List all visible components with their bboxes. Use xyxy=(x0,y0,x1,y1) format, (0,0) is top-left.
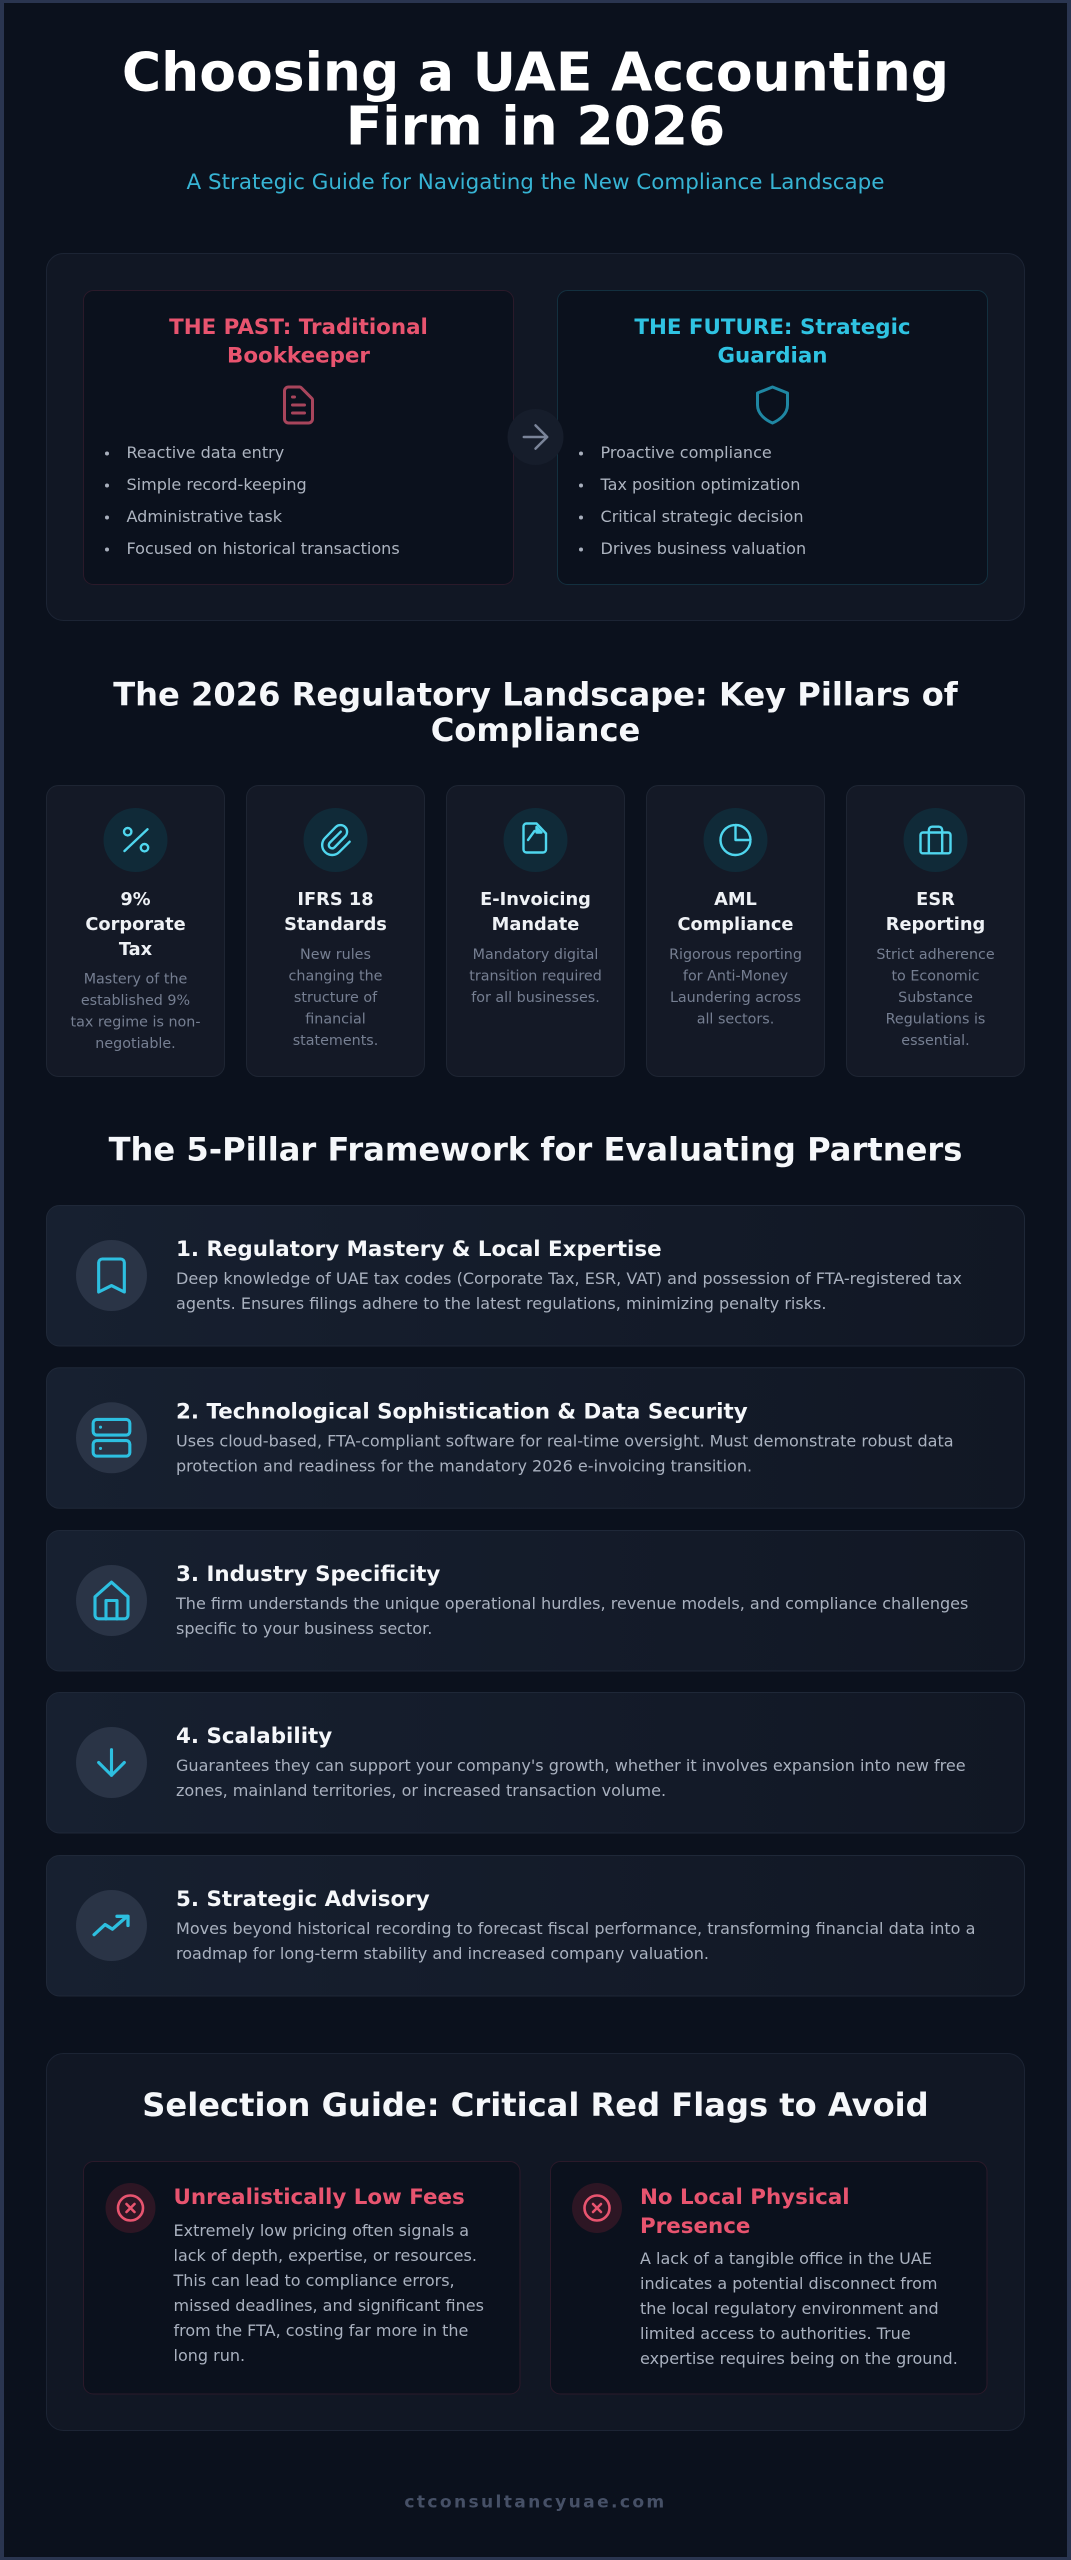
panel: red flags xyxy=(46,2054,1024,2430)
text: corporate tax: negotiable. xyxy=(95,1036,176,1052)
text: IFRS 18: changing the xyxy=(289,968,383,984)
text: no local presence: No Local Physical xyxy=(640,2185,850,2210)
text: e-invoicing: Mandate xyxy=(492,914,579,935)
heading: regulatory landscape: Compliance xyxy=(431,711,640,749)
icon: bookmark xyxy=(76,1240,147,1311)
pillar 4 xyxy=(46,1692,1024,1833)
icon: briefcase xyxy=(904,808,968,872)
text: pillar 2 xyxy=(176,1399,954,1475)
heading: 5-pillar framework: The 5-Pillar Framework for Evaluating Partners xyxy=(109,1130,962,1168)
text: pillar 3: 3. Industry Specificity xyxy=(176,1562,440,1587)
panel: the future xyxy=(558,290,988,584)
text: corporate tax: Mastery of the xyxy=(84,972,188,988)
text: AML: Laundering across xyxy=(670,990,801,1006)
text: pillar 2: protection and readiness for the mandatory 2026 e-invoicing transition. xyxy=(176,1456,752,1475)
text: no local presence: the local regulatory environment and xyxy=(640,2299,939,2318)
text: no local presence: expertise requires being on the ground. xyxy=(640,2349,958,2368)
heading: regulatory landscape xyxy=(113,676,959,749)
text: AML: Compliance xyxy=(678,914,793,935)
icon: trending up xyxy=(76,1890,147,1961)
text: no local presence: A lack of a tangible office in the UAE xyxy=(640,2249,932,2268)
text: pillar 2: Uses cloud-based, FTA-compliant software for real-time oversight. Must demonstrate robust data xyxy=(176,1431,954,1450)
icon: pie chart xyxy=(704,808,768,872)
text: AML xyxy=(669,889,802,1028)
title: Firm in 2026 xyxy=(346,94,725,158)
list: past traits xyxy=(105,443,400,558)
icon: x circle xyxy=(572,2183,622,2233)
pillar 1 xyxy=(46,1206,1024,1346)
text: pillar 3: The firm understands the unique operational hurdles, revenue models, and compliance challenges xyxy=(175,1594,968,1613)
text: low fees: missed deadlines, and significant fines xyxy=(174,2296,484,2315)
text: e-invoicing xyxy=(469,889,602,1006)
heading: the past: THE PAST: Traditional xyxy=(169,315,428,340)
icon: percent xyxy=(104,808,168,872)
title xyxy=(122,40,949,158)
text: e-invoicing: E-Invoicing xyxy=(480,889,591,910)
text: IFRS 18: statements. xyxy=(293,1033,378,1049)
heading: regulatory landscape: The 2026 Regulatory Landscape: Key Pillars of xyxy=(113,676,959,714)
text: e-invoicing: Mandatory digital xyxy=(473,947,598,963)
text: no local presence: Presence xyxy=(640,2214,750,2239)
text: ESR: Substance xyxy=(898,990,973,1006)
list: future traits xyxy=(579,443,806,558)
text: IFRS 18: Standards xyxy=(284,914,387,935)
text: ESR: to Economic xyxy=(891,968,980,984)
arrow: past to future xyxy=(508,409,564,465)
text: ESR: Regulations is xyxy=(886,1012,985,1028)
text: pillar 3 xyxy=(175,1562,968,1638)
pillar 2 xyxy=(46,1368,1024,1508)
card: low fees xyxy=(84,2162,520,2394)
list: past traits: Administrative task xyxy=(126,507,283,526)
text: low fees: long run. xyxy=(174,2346,245,2365)
text: low fees: Unrealistically Low Fees xyxy=(174,2185,465,2210)
text: pillar 4: Guarantees they can support your company's growth, whether it involves expansion into new free xyxy=(176,1756,966,1775)
text: pillar 1: Deep knowledge of UAE tax codes (Corporate Tax, ESR, VAT) and possession of FTA-registered tax xyxy=(176,1269,962,1288)
list: future traits: Drives business valuation xyxy=(600,539,806,558)
text: ESR xyxy=(876,889,995,1049)
heading: the past: Bookkeeper xyxy=(227,344,370,368)
text: ESR: ESR xyxy=(916,889,955,910)
text: corporate tax xyxy=(70,889,201,1052)
text: AML: Rigorous reporting xyxy=(669,947,802,963)
text: corporate tax: Corporate xyxy=(85,914,186,935)
text: corporate tax: tax regime is non- xyxy=(70,1014,201,1030)
icon: document xyxy=(284,387,312,423)
text: IFRS 18: New rules xyxy=(300,947,371,963)
footer: ctconsultancyuae.com xyxy=(404,2492,667,2512)
list: future traits: Critical strategic decision xyxy=(600,507,804,526)
list: past traits: Simple record-keeping xyxy=(126,475,307,494)
text: pillar 5: roadmap for long-term stability and increased company valuation. xyxy=(176,1944,709,1963)
text: low fees: This can lead to compliance errors, xyxy=(172,2271,455,2290)
text: pillar 1: agents. Ensures filings adhere to the latest regulations, minimizing penalty risks. xyxy=(176,1294,826,1313)
heading: the future: Guardian xyxy=(717,344,828,368)
heading: the future: THE FUTURE: Strategic xyxy=(634,315,911,340)
text: no local presence: limited access to authorities. True xyxy=(640,2324,911,2343)
subtitle: A Strategic Guide for Navigating the New Compliance Landscape xyxy=(187,170,884,195)
icon: x circle xyxy=(106,2183,156,2233)
pillar 3 xyxy=(46,1530,1024,1671)
text: no local presence xyxy=(640,2185,958,2368)
text: IFRS 18: IFRS 18 xyxy=(297,889,374,910)
text: corporate tax: established 9% xyxy=(81,993,190,1009)
text: pillar 4: zones, mainland territories, or increased transaction volume. xyxy=(176,1781,666,1800)
list: past traits: Reactive data entry xyxy=(126,443,285,462)
text: low fees: from the FTA, costing far more in the xyxy=(174,2321,468,2340)
text: IFRS 18: structure of xyxy=(294,990,378,1006)
text: corporate tax: 9% xyxy=(120,889,151,910)
card: ESR xyxy=(846,786,1024,1076)
heading: the future xyxy=(634,315,911,368)
list: future traits: Tax position optimization xyxy=(600,475,800,494)
icon: e-invoice document xyxy=(504,808,568,872)
text: IFRS 18: financial xyxy=(305,1012,366,1028)
text: pillar 4 xyxy=(176,1724,966,1800)
icon: house xyxy=(76,1565,147,1636)
text: no local presence: indicates a potential disconnect from xyxy=(640,2274,938,2293)
icon: paperclip xyxy=(304,808,368,872)
text: e-invoicing: transition required xyxy=(469,968,602,984)
card: no local presence xyxy=(550,2162,987,2394)
card: IFRS 18 xyxy=(246,786,424,1076)
text: e-invoicing: for all businesses. xyxy=(471,990,600,1006)
text: pillar 1: 1. Regulatory Mastery & Local Expertise xyxy=(176,1237,662,1262)
text: AML: all sectors. xyxy=(697,1012,774,1028)
card: corporate tax xyxy=(46,786,224,1076)
text: low fees: Extremely low pricing often signals a xyxy=(174,2221,469,2240)
text: pillar 5: 5. Strategic Advisory xyxy=(176,1887,430,1912)
text: low fees xyxy=(172,2185,484,2365)
text: pillar 1 xyxy=(176,1237,962,1313)
text: pillar 5: Moves beyond historical recording to forecast fiscal performance, transforming financial data into a xyxy=(176,1919,975,1938)
text: IFRS 18 xyxy=(284,889,387,1049)
text: pillar 3: specific to your business sector. xyxy=(176,1619,432,1638)
text: AML: for Anti-Money xyxy=(683,968,789,984)
text: ESR: Reporting xyxy=(886,914,985,935)
text: ESR: essential. xyxy=(901,1033,970,1049)
heading: red flags: Selection Guide: Critical Red Flags to Avoid xyxy=(142,2086,929,2124)
card: AML xyxy=(646,786,824,1076)
text: AML: AML xyxy=(714,889,757,910)
text: ESR: Strict adherence xyxy=(876,947,995,963)
icon: shield xyxy=(758,387,788,423)
text: pillar 5 xyxy=(176,1887,975,1963)
panel: the past xyxy=(84,290,514,584)
text: pillar 4: 4. Scalability xyxy=(176,1724,332,1749)
text: low fees: lack of depth, expertise, or resources. xyxy=(174,2246,477,2265)
list: past traits: Focused on historical transactions xyxy=(126,539,400,558)
title: Choosing a UAE Accounting xyxy=(122,40,949,104)
card: e-invoicing xyxy=(446,786,624,1076)
heading: the past xyxy=(169,315,428,368)
icon: arrow down xyxy=(76,1727,147,1798)
text: corporate tax: Tax xyxy=(119,939,153,960)
panel: past vs future comparison xyxy=(46,254,1024,620)
pillar 5 xyxy=(46,1856,1024,1996)
list: future traits: Proactive compliance xyxy=(600,443,772,462)
icon: server xyxy=(76,1402,147,1473)
text: pillar 2: 2. Technological Sophistication & Data Security xyxy=(176,1399,748,1424)
